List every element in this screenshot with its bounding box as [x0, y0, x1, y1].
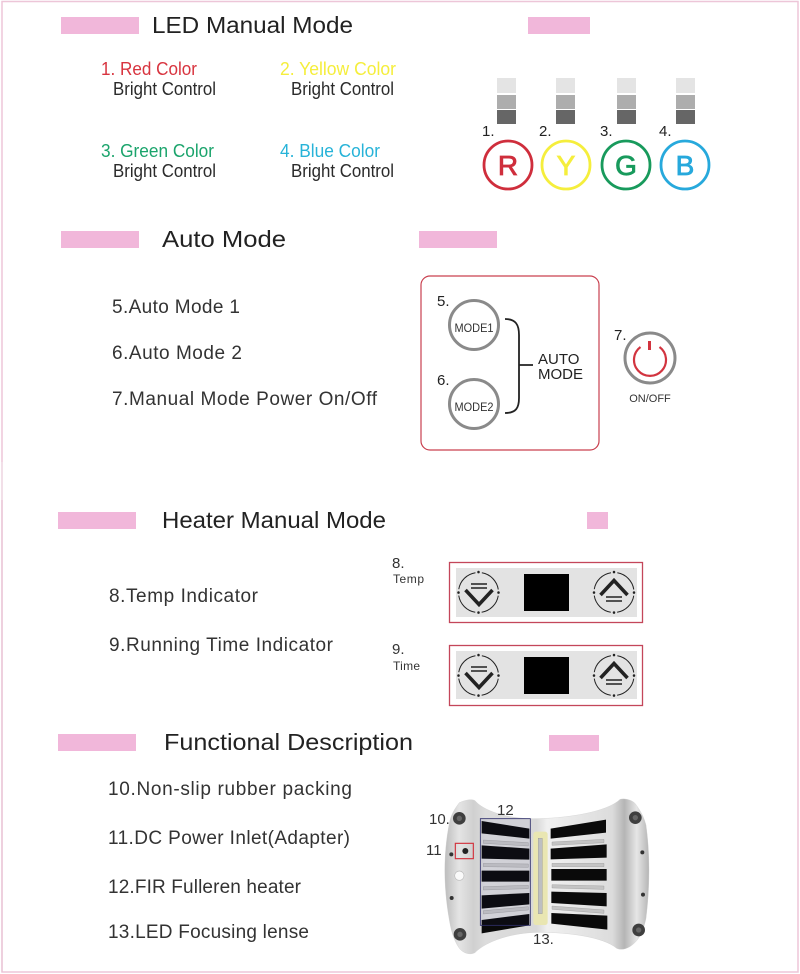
- pink bar: Functional heading left: [58, 734, 136, 751]
- bracket: [505, 319, 533, 413]
- pink bar: Heater heading left: [58, 512, 136, 529]
- section: Heater Manual Mode: [58, 507, 642, 706]
- list: heater items: [109, 586, 334, 656]
- panel: time control: [450, 646, 642, 706]
- button: MODE1: [437, 293, 498, 350]
- label: blue color: [280, 140, 394, 181]
- button: G: G: [615, 150, 637, 181]
- label: red color: [101, 58, 216, 99]
- label: AUTO MODE: AUTO: [538, 351, 579, 368]
- label: 8 Temp: 8.: [392, 555, 405, 572]
- icon: up arrow: [594, 655, 634, 696]
- label: AUTO MODE: [538, 351, 583, 383]
- list: auto mode items: 6.Auto Mode 2: [112, 343, 242, 364]
- list: heater items: 9.Running Time Indicator: [109, 635, 334, 656]
- pink bar: LED heading left: [61, 17, 139, 34]
- item 13: yellow LED lens: [533, 832, 548, 925]
- panel: auto mode buttons: [421, 276, 599, 450]
- heading: Auto Mode: Auto Mode: [162, 226, 286, 252]
- list: functional items: 13.LED Focusing lense: [108, 922, 309, 943]
- section: Auto Mode: [61, 226, 675, 450]
- button: MODE1: 5.: [437, 293, 450, 310]
- button: G: [600, 123, 650, 189]
- pink bar: Heater heading right: [587, 512, 608, 529]
- pink bar: Auto heading right: [419, 231, 497, 248]
- panel: temp control: [450, 562, 642, 622]
- label: blue color: Bright Control: [291, 160, 394, 181]
- button: MODE2: 6.: [437, 372, 450, 389]
- button: R: R: [498, 150, 518, 181]
- label: green color: 3. Green Color: [101, 140, 214, 161]
- label: 8 Temp: [392, 555, 424, 586]
- list: auto mode items: 7.Manual Mode Power On/Off: [112, 389, 378, 410]
- callout labels: [426, 802, 554, 948]
- rubber feet and screws: [449, 811, 645, 941]
- label: red color: 1. Red Color: [101, 58, 197, 79]
- list: heater items: 8.Temp Indicator: [109, 586, 259, 607]
- pink bar: LED heading right: [528, 17, 590, 34]
- item 12: blue outline: [480, 819, 530, 925]
- button: Y: 2.: [539, 123, 552, 140]
- button: Y: Y: [557, 150, 576, 181]
- heading: Functional Description: Functional Description: [164, 729, 413, 755]
- button: power on/off: ON/OFF: [629, 393, 671, 405]
- diagram: lamp underside: [445, 799, 649, 954]
- pink bar: Auto heading left: [61, 231, 139, 248]
- label: AUTO MODE: MODE: [538, 366, 583, 383]
- list: functional items: 11.DC Power Inlet(Adapter): [108, 828, 350, 849]
- button: R: [482, 123, 532, 189]
- label: yellow color: 2. Yellow Color: [280, 58, 396, 79]
- label: green color: Bright Control: [113, 160, 216, 181]
- button: Y: [539, 123, 590, 189]
- button: B: 4.: [659, 123, 672, 140]
- label: yellow color: Bright Control: [291, 78, 394, 99]
- label: red color: Bright Control: [113, 78, 216, 99]
- button: power on/off: 7.: [614, 327, 627, 344]
- heading: Heater Manual Mode: Heater Manual Mode: [162, 507, 386, 533]
- list: auto mode items: 5.Auto Mode 1: [112, 297, 240, 318]
- section: LED Manual Mode: [61, 12, 709, 189]
- item 11: red outline: [455, 843, 473, 859]
- list: functional items: [108, 779, 352, 943]
- callout labels: 10.: [429, 811, 450, 828]
- pink bar: Functional heading right: [549, 735, 599, 751]
- button: MODE2: MODE2: [454, 402, 494, 414]
- label: green color: [101, 140, 216, 181]
- label: 9 Time: 9.: [392, 641, 405, 658]
- button: B: [659, 123, 709, 189]
- label: 9 Time: Time: [393, 659, 420, 673]
- left and right LED strips: [483, 839, 604, 914]
- button: R: 1.: [482, 123, 495, 140]
- list: functional items: 10.Non-slip rubber packing: [108, 779, 352, 800]
- button: G: 3.: [600, 123, 613, 140]
- callout labels: 13.: [533, 931, 554, 948]
- label: blue color: 4. Blue Color: [280, 140, 380, 161]
- icon: down arrow: [458, 655, 498, 696]
- left black heater strips: [482, 821, 529, 933]
- callout labels: 11: [426, 842, 442, 859]
- brightness bars: [497, 78, 695, 124]
- callout labels: 12: [497, 802, 514, 819]
- right black heater strips: [551, 820, 607, 930]
- icon: up arrow: [594, 572, 634, 613]
- label: 9 Time: [392, 641, 420, 673]
- list: auto mode items: [112, 297, 378, 410]
- heading: LED Manual Mode: LED Manual Mode: [152, 12, 353, 38]
- icon: down arrow: [458, 572, 498, 613]
- section: Functional Description: [58, 729, 649, 954]
- label: yellow color: [280, 58, 396, 99]
- button: power on/off: [614, 327, 675, 405]
- label: 8 Temp: Temp: [393, 572, 424, 586]
- silver body: [445, 799, 649, 954]
- button: MODE2: [437, 372, 498, 428]
- list: functional items: 12.FIR Fulleren heater: [108, 877, 302, 898]
- button: B: B: [676, 150, 694, 181]
- button: MODE1: MODE1: [454, 323, 494, 335]
